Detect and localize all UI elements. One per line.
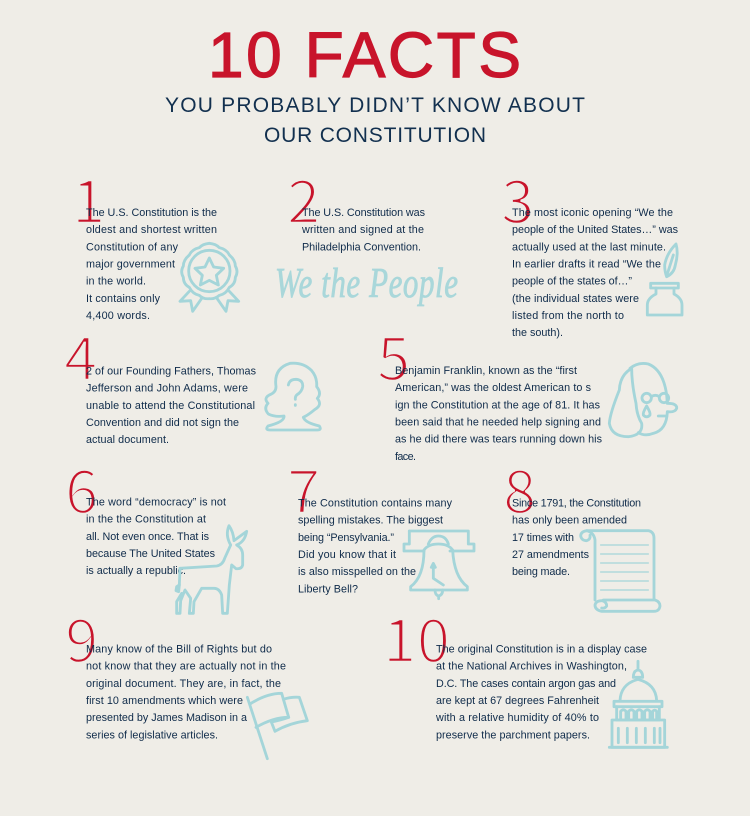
text block 6: all. Not even once. That is: [86, 531, 210, 543]
fact 10: [383, 593, 667, 747]
number 6: 6: [65, 444, 98, 531]
text block 8: 27 amendments: [512, 549, 590, 561]
text block 6: The word “democracy” is not: [86, 496, 226, 508]
script: We the People: We the People: [275, 259, 458, 306]
text block 10: D.C. The cases contain argon gas and: [436, 678, 616, 690]
text block 1: Constitution of any: [86, 241, 179, 253]
text block 8: being made.: [512, 566, 570, 578]
icon: Capitol building: [609, 661, 667, 747]
text block 3: (the individual states were: [512, 293, 639, 305]
number 2: 2: [287, 154, 320, 241]
text block 9: not know that they are actually not in the: [86, 661, 286, 673]
text block 5: American,” was the oldest American to s: [395, 382, 592, 394]
text block 8: has only been amended: [512, 515, 627, 527]
text block 4: Jefferson and John Adams, were: [86, 383, 248, 395]
number 4: 4: [64, 311, 97, 398]
text block 10: preserve the parchment papers.: [436, 729, 590, 741]
text block 1: major government: [86, 258, 175, 270]
text block 8: Since 1791, the Constitution: [512, 498, 641, 510]
text block 4: actual document.: [86, 434, 169, 446]
fact 3: [501, 154, 682, 339]
text block 7: Liberty Bell?: [298, 583, 358, 595]
fact 1: [72, 154, 239, 322]
fact 2: [275, 154, 458, 306]
icon: flag: [247, 693, 307, 759]
text block 7: being “Pensylvania.”: [298, 532, 394, 544]
text block 5: [395, 365, 603, 463]
text block 2: written and signed at the: [301, 224, 424, 236]
icon: Liberty Bell: [404, 531, 474, 599]
text block 6: is actually a republic.: [86, 565, 186, 577]
text block 2: The U.S. Constitution was: [302, 207, 426, 219]
text block 3: The most iconic opening “We the: [512, 207, 673, 219]
text block 3: [512, 207, 679, 339]
text block 10: with a relative humidity of 40% to: [435, 712, 599, 724]
fact 9: [65, 593, 307, 759]
text block 7: spelling mistakes. The biggest: [298, 515, 443, 527]
text block 9: presented by James Madison in a: [86, 712, 247, 724]
text block 2: Philadelphia Convention.: [302, 241, 421, 253]
text block 1: oldest and shortest written: [86, 224, 217, 236]
fact 5: [377, 311, 677, 463]
text block 7: is also misspelled on the: [298, 566, 416, 578]
text block 3: people of the states of…”: [512, 276, 632, 288]
text block 3: the south).: [512, 327, 563, 339]
icon: Benjamin Franklin head: [609, 363, 677, 437]
text block 10: [435, 644, 647, 741]
text block 5: Benjamin Franklin, known as the “first: [395, 365, 577, 377]
fact 6: [65, 444, 247, 613]
text block 4: [86, 366, 257, 446]
number 8: 8: [503, 444, 536, 531]
text block 3: people of the United States…” was: [512, 224, 679, 236]
subtitle: YOU PROBABLY DIDN’T KNOW ABOUT: [165, 94, 585, 117]
number 3: 3: [501, 154, 534, 241]
text block 1: [86, 207, 217, 322]
number 1: 1: [72, 154, 105, 241]
title: [165, 19, 585, 147]
number 10: 10: [383, 593, 450, 680]
text block 7: [298, 498, 453, 595]
text block 10: are kept at 67 degrees Fahrenheit: [436, 695, 599, 707]
text block 9: series of legislative articles.: [86, 729, 218, 741]
text block 1: in the world.: [86, 276, 146, 288]
text block 4: unable to attend the Constitutional: [86, 400, 255, 412]
title: 10 FACTS: [208, 19, 521, 91]
text block 6: in the the Constitution at: [86, 514, 206, 526]
text block 9: first 10 amendments which were: [86, 695, 243, 707]
text block 5: been said that he needed help signing and: [395, 416, 601, 428]
text block 5: ign the Constitution at the age of 81. It has: [395, 399, 601, 411]
text block 6: [86, 496, 226, 577]
text block 1: It contains only: [86, 293, 161, 305]
icon: medal with star: [180, 243, 239, 311]
number 7: 7: [287, 444, 320, 531]
icon: silhouette with question mark: [266, 363, 320, 430]
icon: quill and inkwell: [647, 244, 682, 315]
text block 1: 4,400 words.: [86, 310, 150, 322]
text block 7: The Constitution contains many: [298, 498, 453, 510]
text block 5: as he did there was tears running down his: [395, 434, 603, 446]
text block 10: at the National Archives in Washington,: [436, 661, 627, 673]
text block 8: [512, 498, 641, 578]
text block 8: 17 times with: [512, 532, 574, 544]
text block 9: [86, 644, 286, 741]
text block 9: Many know of the Bill of Rights but do: [86, 644, 272, 656]
text block 2: [301, 207, 426, 253]
text block 4: Convention and did not sign the: [86, 417, 239, 429]
subtitle: OUR CONSTITUTION: [264, 124, 486, 147]
number 9: 9: [65, 593, 98, 680]
text block 3: In earlier drafts it read “We the: [512, 258, 661, 270]
text block 3: listed from the north to: [512, 310, 624, 322]
text block 9: original document. They are, in fact, the: [86, 678, 281, 690]
icon: donkey: [176, 526, 247, 613]
number 5: 5: [377, 311, 410, 398]
text block 7: Did you know that it: [298, 549, 396, 561]
fact 4: [64, 311, 320, 446]
fact 8: [503, 444, 660, 611]
text block 10: The original Constitution is in a display case: [436, 644, 647, 656]
text block 1: The U.S. Constitution is the: [86, 207, 217, 219]
subtitle: [165, 94, 585, 147]
text block 5: face.: [395, 451, 416, 463]
text block 4: 2 of our Founding Fathers, Thomas: [86, 366, 257, 378]
text block 3: actually used at the last minute.: [512, 241, 666, 253]
fact 7: [287, 444, 474, 599]
text block 6: because The United States: [86, 548, 216, 560]
icon: scroll: [581, 531, 660, 611]
